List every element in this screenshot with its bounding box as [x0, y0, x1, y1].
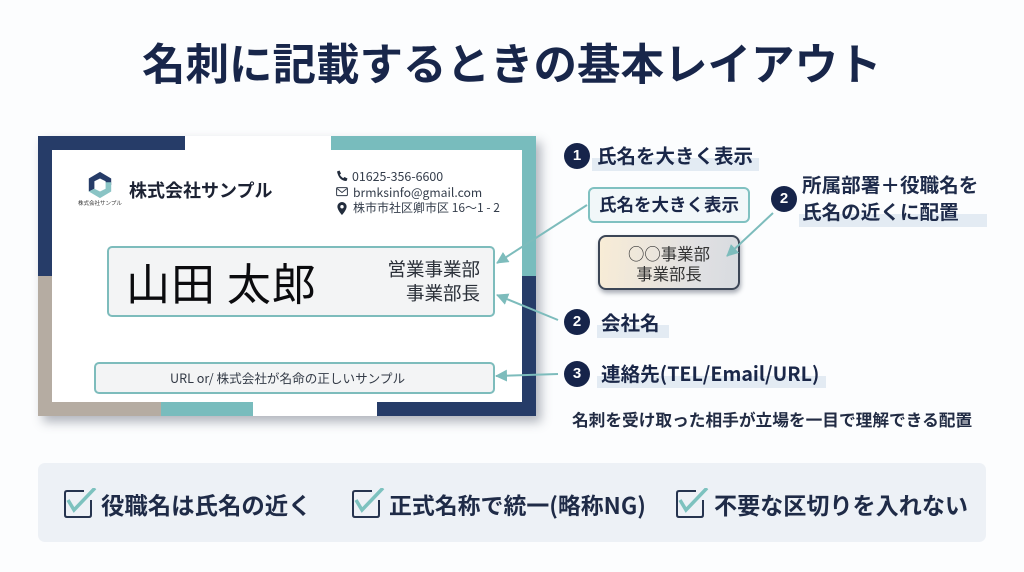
number badge 2: 2 — [573, 313, 581, 330]
title: 名刺に記載するときの基本レイアウト — [142, 30, 882, 93]
contact box — [94, 362, 495, 394]
number badge 3: 3 — [573, 365, 581, 382]
person name: 山田 太郎 — [126, 249, 317, 313]
sample: department and position box: ○○事業部 — [628, 241, 710, 265]
callout 2: company name — [564, 307, 669, 338]
address: 株市市社区卿市区 16〜1 - 2 — [353, 199, 500, 216]
logo caption: 株式会社サンプル — [78, 199, 122, 207]
label: 役職名は氏名の近く — [101, 487, 312, 521]
highlight — [597, 376, 826, 388]
callout 2: department plus position — [771, 169, 987, 227]
sample: department and position box: 事業部長 — [636, 260, 702, 284]
check item 3 — [676, 487, 968, 521]
label: 会社名 — [601, 307, 660, 336]
icon: mail — [336, 187, 348, 196]
label: 不要な区切りを入れない — [714, 487, 968, 521]
sample: department and position box — [598, 235, 740, 290]
highlight — [592, 158, 759, 171]
icon: checkbox — [676, 488, 708, 518]
icon: checkbox — [64, 488, 96, 518]
card border segments — [38, 136, 536, 416]
label: 氏名の近くに配置 — [802, 196, 959, 225]
label — [802, 169, 978, 225]
panel: business card — [38, 136, 536, 416]
department and position: 営業事業部 — [387, 256, 480, 282]
callout 3: contact — [564, 358, 826, 388]
name box — [107, 246, 495, 317]
callout 1: show name large — [564, 140, 759, 171]
number badge 1: 1 — [573, 147, 581, 164]
tag: show name large — [588, 187, 750, 223]
label: 連絡先(TEL/Email/URL) — [601, 358, 819, 387]
number badge 1 — [564, 143, 590, 169]
check item 2 — [352, 487, 646, 521]
highlight — [597, 325, 669, 338]
icon: phone — [337, 170, 348, 181]
check item 1 — [64, 487, 312, 521]
company name: 株式会社サンプル — [129, 177, 272, 203]
number badge 2 — [771, 186, 797, 212]
number badge 3 — [564, 361, 590, 387]
panel: checklist — [38, 463, 986, 542]
icon: company logo — [88, 172, 112, 198]
note text: 名刺を受け取った相手が立場を一目で理解できる配置 — [572, 407, 972, 431]
label: 氏名を大きく表示 — [597, 140, 753, 169]
email: brmksinfo@gmail.com — [353, 183, 482, 201]
icon: location pin — [337, 202, 347, 215]
tag: show name large: 氏名を大きく表示 — [599, 192, 739, 217]
icon: checkbox — [352, 488, 384, 518]
department and position: 事業部長 — [406, 280, 480, 306]
number badge 2 — [564, 309, 590, 335]
label: 所属部署＋役職名を — [802, 169, 978, 198]
number badge 2: 2 — [780, 190, 788, 207]
phone number: 01625-356-6600 — [352, 167, 443, 185]
highlight — [799, 214, 987, 227]
contact box text: URL or/ 株式会社が名命の正しいサンプル — [170, 368, 405, 387]
department and position — [387, 256, 480, 306]
label: 正式名称で統一(略称NG) — [389, 487, 646, 521]
